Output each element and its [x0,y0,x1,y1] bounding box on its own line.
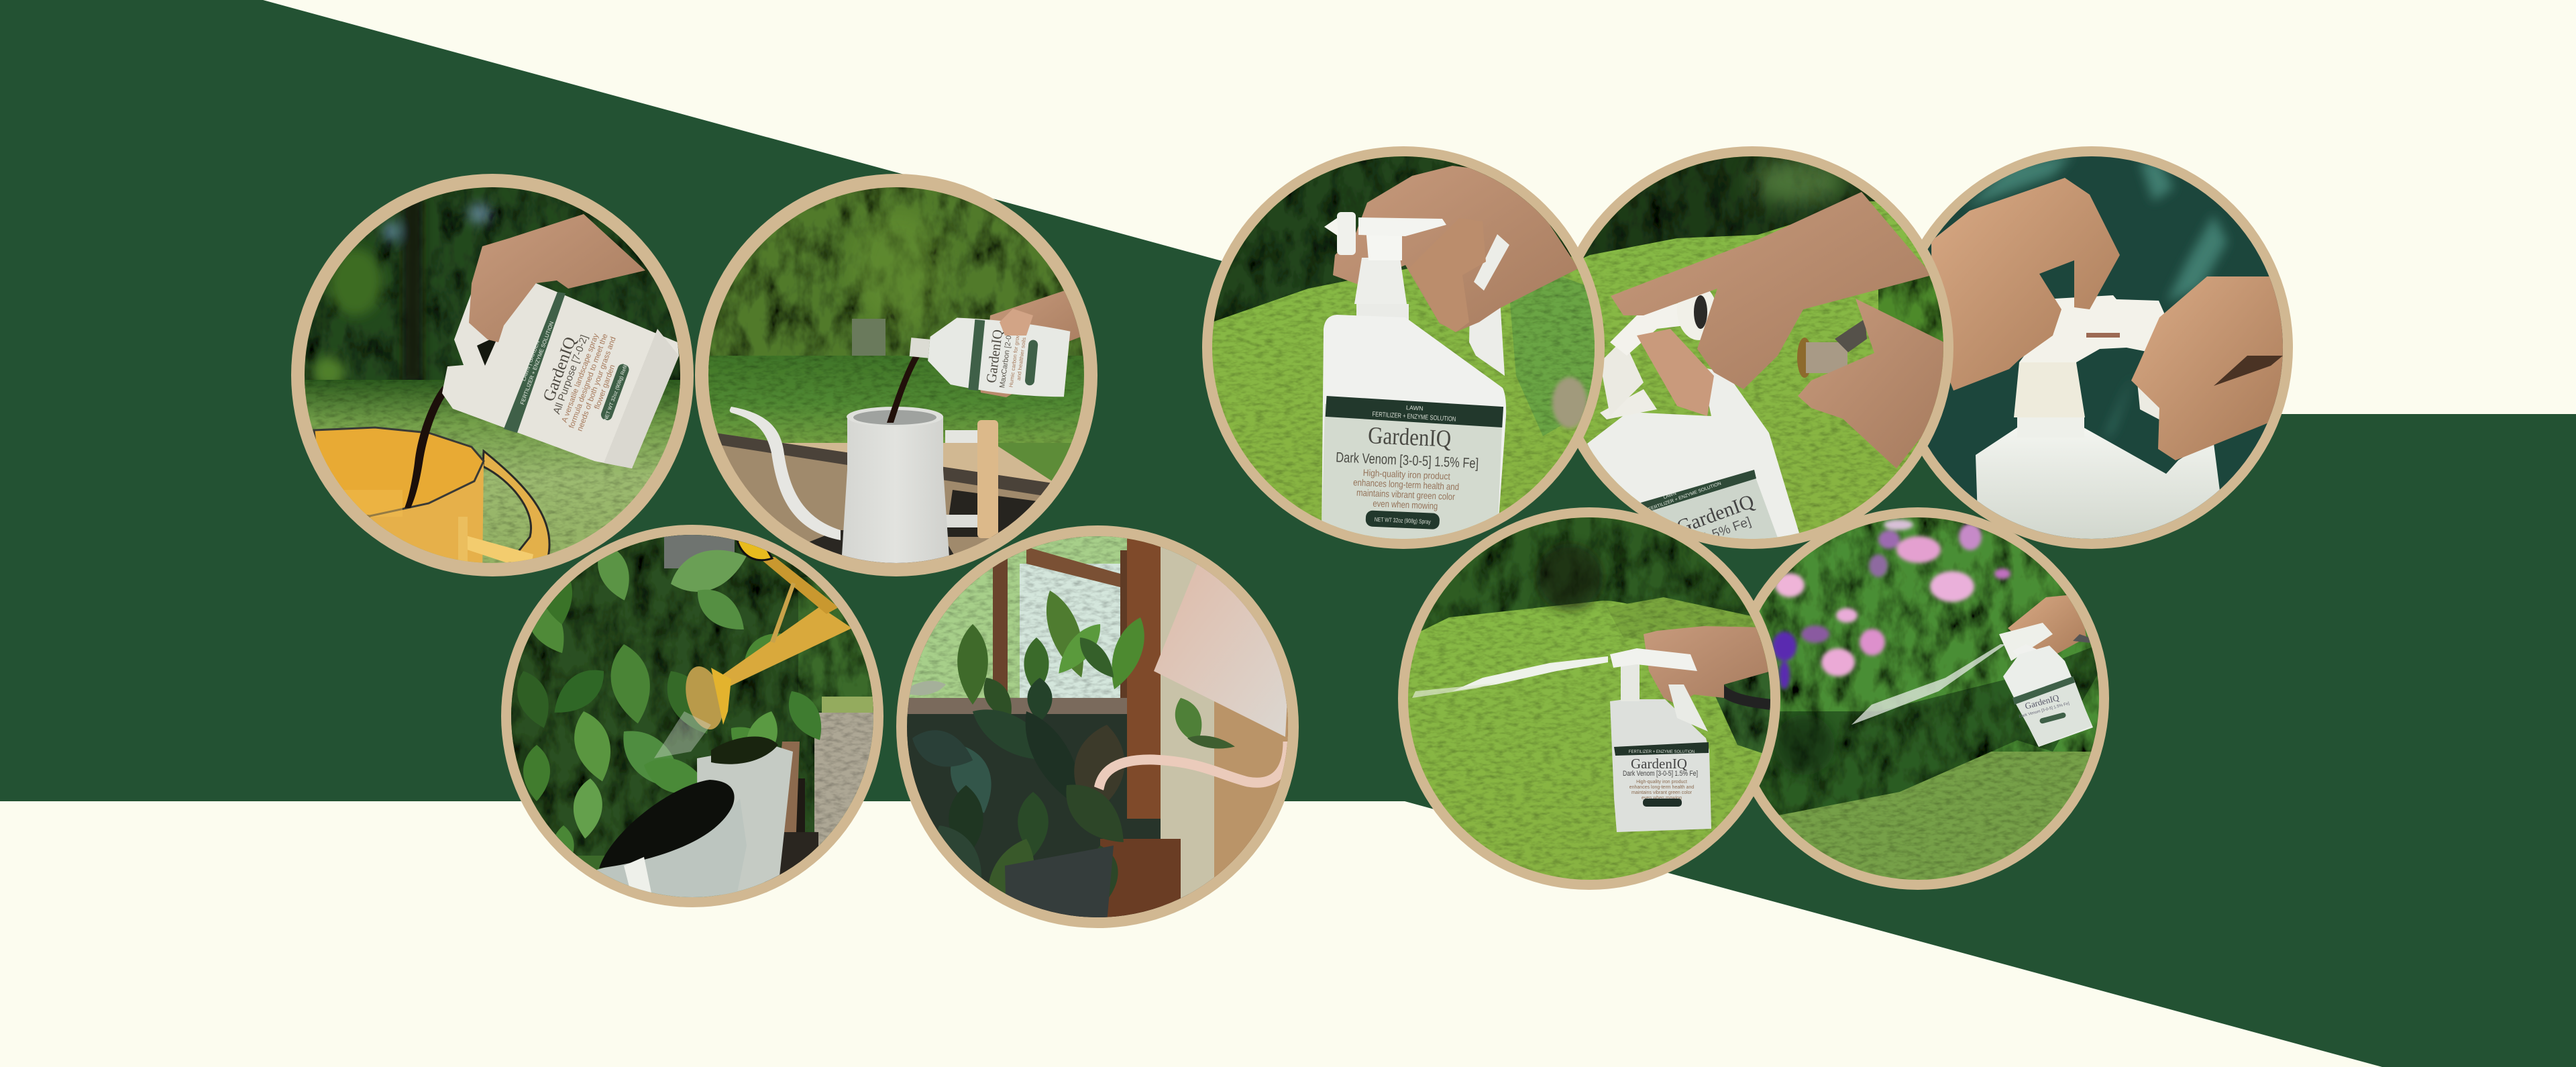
Dark Venom bottle: Dark Venom [3-0-5] 1.5% Fe] [1623,770,1698,778]
brass hose fitting [1797,319,1867,378]
photo: spraying lawn with Dark Venom bottle [1398,507,1780,890]
Dark Venom bottle tilted: FERTILIZER + ENZYME SOLUTION [1648,481,1722,512]
liquid stream [405,386,445,508]
photo: holding Dark Venom bottle with sprayer [1202,146,1605,549]
stream [887,354,920,423]
left hand [1931,178,2120,391]
forearm and hand [1611,192,1932,389]
jug label text: All Purpose [7-0-2] [551,334,590,415]
white bottle [1976,295,2220,557]
Dark Venom bottle: NET WT 32oz (908g) Spray [1375,516,1431,525]
photo: hand connecting hose to sprayer [1551,146,1953,549]
Dark Venom bottle: High-quality iron product [1363,467,1450,482]
right hand [2131,276,2283,460]
photo: spraying flower bed with hose-end sprayer [1727,507,2109,890]
Dark Venom bottle [1610,648,1711,832]
photo: watering plant with yellow can [501,525,883,907]
jug label text: flower garden [593,364,616,411]
fingers over sprayer [1409,218,1486,332]
carbon bottle [907,312,1071,399]
spray jet [1851,644,2006,725]
Dark Venom bottle: Dark Venom [3-0-5] 1.5% Fe] [1336,450,1479,472]
yellow watering can [314,427,549,577]
Dark Venom bottle tilted: LAWN [1663,491,1677,500]
hand [469,214,645,342]
helping hand [1798,299,1944,468]
Dark Venom bottle: maintains vibrant green color [1631,791,1693,795]
tilted spray bottle [2003,646,2093,747]
hand and sprayer [2008,594,2086,661]
water jet [1452,656,1608,691]
All Purpose jug [442,276,679,468]
soil and pots [590,737,793,906]
jug label text: NET WT 32oz (908g) Refill [602,363,629,421]
carbon bottle: Humic carbon for growth [1008,329,1022,388]
white can and spout [1099,550,1295,789]
photo: white can watering indoor plant [896,525,1301,939]
Dark Venom bottle: enhances long-term health and [1353,476,1459,492]
jug label text: needs of both your grass and [576,336,618,432]
carbon bottle: GardenIQ [983,329,1006,384]
carbon bottle: MaxCarbon [2-0-5] [998,326,1014,389]
house plant leaves [910,591,1235,903]
jug label text [511,312,638,440]
sprayer collar and head [2014,362,2085,417]
flowers [1772,519,2010,689]
bottle label [1326,396,1503,427]
Dark Venom bottle: maintains vibrant green color [1356,487,1456,502]
carbon bottle: and healthier soils [1016,337,1027,380]
thumb over bottle [1000,309,1033,336]
Dark Venom bottle: even when mowing [1642,796,1682,801]
bottle label: LAWN [1406,404,1424,412]
hose-end sprayer [1324,212,1509,304]
Dark Venom bottle tilted [1587,283,1801,547]
jug label text: LAWN | GARDEN [521,340,541,382]
jug label text: GardenIQ [540,335,580,404]
Dark Venom bottle: GardenIQ [1367,421,1452,452]
fingers [1637,329,1714,416]
Dark Venom bottle: High-quality iron product [1636,780,1687,784]
patio [708,433,1084,576]
jug label text: A versatile landscape spray [561,332,600,423]
Dark Venom bottle: GardenIQ [1631,756,1687,772]
photo: pouring bottle into white can [695,174,1097,576]
Dark Venom bottle tilted: GardenIQ [1674,490,1757,539]
jug label text: formula designed to meet the [568,333,610,429]
Dark Venom bottle [1322,299,1506,539]
hand and hose [1714,681,1771,705]
photo: attaching sprayer, hands over bottle [1890,146,2293,557]
hand behind sprayer [1333,166,1578,332]
Dark Venom bottle tilted: 1.5% Fe] [1701,515,1753,546]
Dark Venom bottle: enhances long-term health and [1629,785,1694,790]
bottle label: FERTILIZER + ENZYME SOLUTION [1372,411,1456,423]
jug label text: FERTILIZER + ENZYME SOLUTION [519,321,555,405]
hand behind bottle [986,290,1084,362]
tilted spray bottle: Dark Venom [3-0-5] 1.5% Fe] [2019,702,2070,719]
tilted spray bottle: GardenIQ [2024,693,2060,711]
pot [1005,846,1114,923]
Dark Venom bottle: even when mowing [1373,498,1438,511]
water droplets [654,711,711,758]
white watering can [730,407,998,576]
photo: pouring All Purpose jug into yellow can [291,174,694,577]
yellow can spout and rose [680,533,852,733]
Dark Venom bottle: FERTILIZER + ENZYME SOLUTION [1629,750,1695,754]
